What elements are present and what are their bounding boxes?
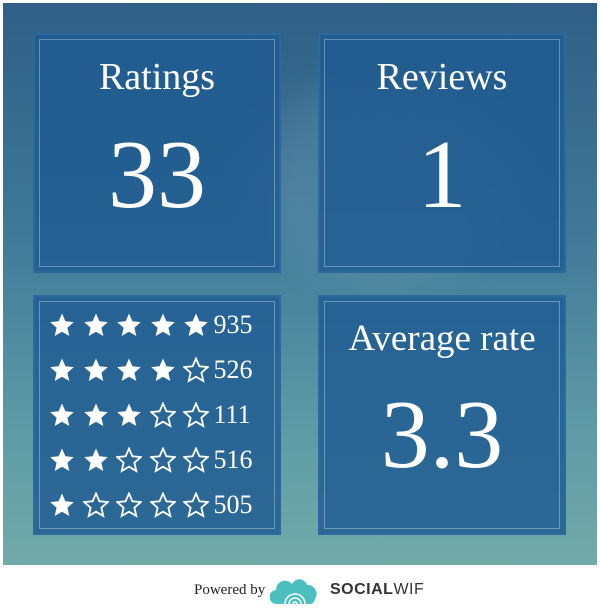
panel: reviews xyxy=(318,33,566,273)
heading: reviews: Reviews xyxy=(377,56,507,98)
heading: average rate: Average rate xyxy=(348,318,536,359)
row: 1 star: 505 xyxy=(214,490,252,519)
text: socialwif: SOCIALWIF xyxy=(330,581,424,598)
heading: ratings: Ratings xyxy=(99,56,215,98)
icon: cloud logo xyxy=(270,579,317,604)
value: average rate: 3.3 xyxy=(381,381,503,489)
row: 3 stars: 111 xyxy=(214,400,251,429)
value: reviews: 1 xyxy=(418,121,466,229)
row: 5 stars: 935 xyxy=(214,310,252,339)
row: 1 star xyxy=(50,490,252,519)
row: 3 stars xyxy=(50,400,251,429)
row: 2 stars: 516 xyxy=(214,445,252,474)
row: 5 stars xyxy=(50,310,252,339)
row: 4 stars: 526 xyxy=(214,355,252,384)
row: 2 stars xyxy=(50,445,252,474)
value: ratings: 33 xyxy=(108,121,206,229)
text: powered by: Powered by xyxy=(194,582,265,598)
panel: average rate xyxy=(318,295,566,535)
panel: ratings xyxy=(33,33,281,273)
panel: star breakdown xyxy=(33,295,281,535)
footer xyxy=(194,579,424,604)
row: 4 stars xyxy=(50,355,252,384)
